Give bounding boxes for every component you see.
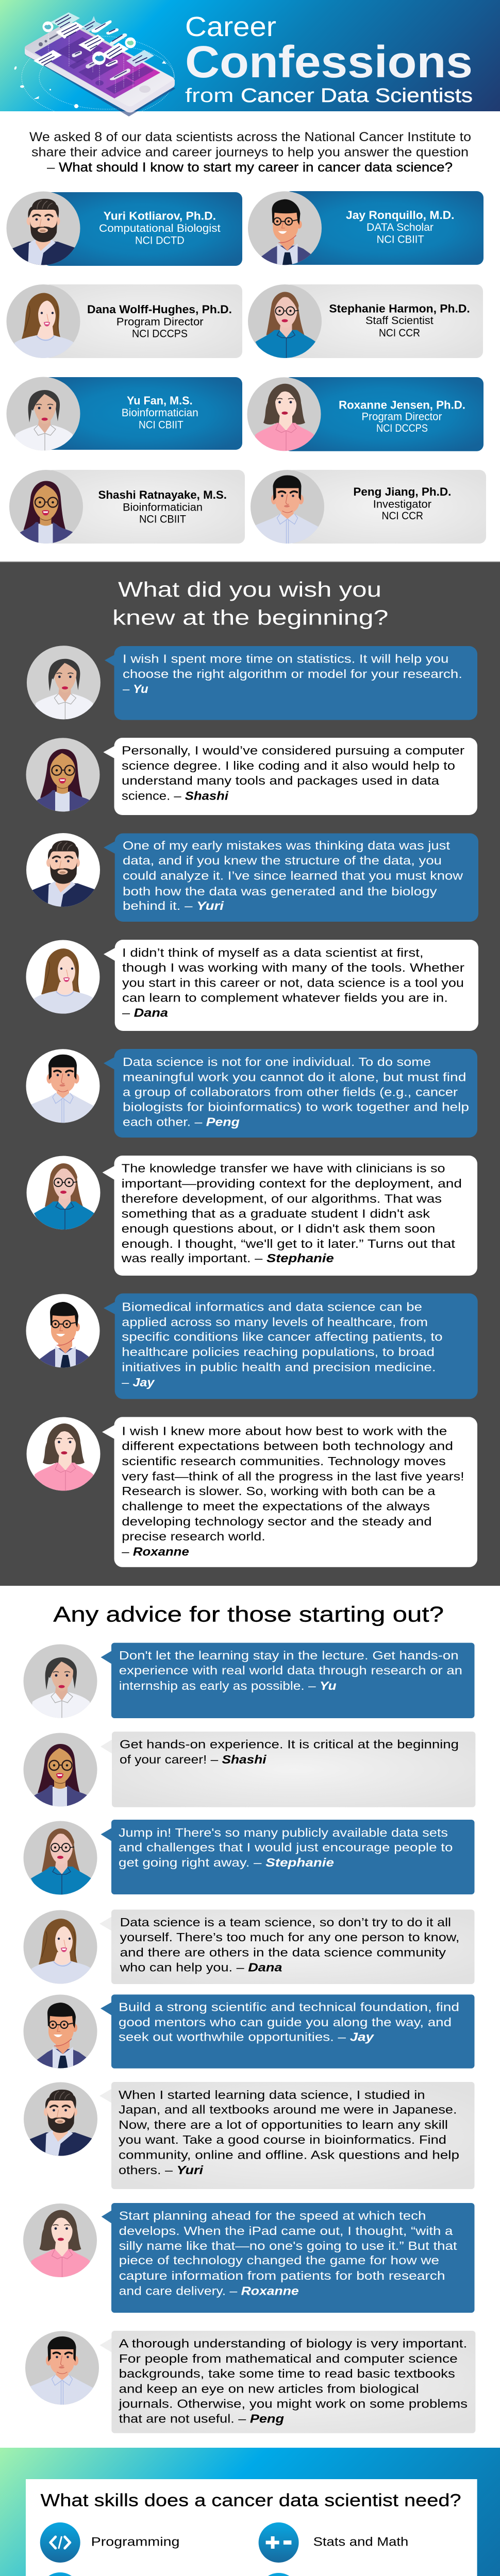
name and role: Program Director <box>116 316 204 328</box>
card: Yuri Kotliarov <box>6 192 242 269</box>
speech bubble: Data science is not for one individual. To do some <box>123 1055 431 1069</box>
speech bubble: behind it. – Yuri <box>123 899 224 912</box>
skill: Programming <box>40 2522 179 2563</box>
speech bubble <box>103 738 477 815</box>
name and role: NCI DCCPS <box>376 422 428 434</box>
speech bubble: – Roxanne <box>122 1545 189 1558</box>
speech bubble: Get hands-on experience. It is critical at the beginning <box>120 1737 459 1751</box>
quote: Yuri <box>26 833 478 922</box>
skill: Stats and Math: Stats and Math <box>313 2535 408 2549</box>
portrait: Dana <box>6 284 80 363</box>
speech bubble: initiatives in public health and precision medicine. <box>122 1361 436 1374</box>
advice: Dana <box>24 1909 474 1988</box>
speech bubble: and care delivery. – Roxanne <box>119 2284 299 2297</box>
speech bubble: of your career! – Shashi <box>120 1753 266 1766</box>
card: Stephanie Harmon <box>248 284 483 359</box>
name and role: Bioinformatician <box>123 501 203 513</box>
speech bubble <box>99 2331 475 2433</box>
heading: knew at the beginning? <box>112 606 389 630</box>
card: Shashi Ratnayake <box>9 470 245 548</box>
name and role <box>339 399 465 434</box>
speech bubble: Japan, and all textbooks around me were in Japanese. <box>119 2103 457 2116</box>
speech bubble: enough. I thought, “we'll get to it later.” Turns out that <box>122 1237 456 1250</box>
name and role: Computational Biologist <box>99 223 221 234</box>
portrait: Yuri <box>26 833 100 911</box>
name and role: Peng Jiang, Ph.D. <box>353 485 451 498</box>
speech bubble: Data science is a team science, so don’t try to do it all <box>120 1916 451 1929</box>
portrait: Yu <box>6 377 80 455</box>
advice: Yu <box>24 1643 474 1722</box>
speech bubble: and keep an eye on new articles from biological <box>119 2382 419 2395</box>
speech bubble: applied across so many levels of healthcare, from <box>122 1315 428 1329</box>
speech bubble: healthcare policies reaching populations, to broad <box>122 1345 435 1359</box>
speech bubble: you start in this career or not, data science is a tool you <box>122 976 464 990</box>
speech bubble: could analyze it. I’ve since learned that you must know <box>123 869 463 882</box>
speech bubble: yourself. There’s too much for any one person to know, <box>120 1930 459 1944</box>
portrait: Shashi <box>26 738 100 816</box>
speech bubble <box>103 1156 477 1276</box>
title <box>185 11 473 107</box>
name and role: Investigator <box>373 499 431 511</box>
speech bubble: I wish I spent more time on statistics. It will help you <box>123 652 448 666</box>
speech bubble: scientific research communities. Technology moves <box>122 1454 446 1468</box>
name and role: NCI CCR <box>379 327 420 339</box>
name and role <box>353 485 451 522</box>
name and role: Jay Ronquillo, M.D. <box>346 209 455 222</box>
title: Cancer Data Scientists <box>241 85 473 107</box>
speech bubble: The knowledge transfer we have with clinicians is so <box>122 1162 445 1175</box>
speech bubble <box>101 1732 475 1807</box>
name and role <box>99 210 221 246</box>
name and role: DATA Scholar <box>366 222 434 233</box>
name and role: Yu Fan, M.S. <box>127 394 193 407</box>
speech bubble: you want. Take a good course in bioinformatics. Find <box>119 2133 446 2146</box>
speech bubble: Build a strong scientific and technical foundation, find <box>119 2001 459 2014</box>
speech bubble: experience with real world data through research or an <box>119 1664 462 1677</box>
icon: atom <box>40 2572 80 2576</box>
speech bubble: internship as early as possible. – Yu <box>119 1679 337 1692</box>
speech bubble: science degree. I like coding and it also would help to <box>122 759 455 772</box>
speech bubble: choose the right algorithm or model for your research. <box>123 667 462 681</box>
speech bubble <box>99 1909 474 1984</box>
speech bubble: I didn’t think of myself as a data scientist at first, <box>122 946 424 959</box>
skill: Technology and Trends <box>259 2573 460 2576</box>
speech bubble: who can help you. – Dana <box>119 1961 282 1974</box>
advice: Yuri <box>24 2082 474 2189</box>
speech bubble: – Dana <box>122 1006 168 1020</box>
quote: Roxanne <box>27 1417 477 1567</box>
name and role <box>329 302 470 339</box>
speech bubble: piece of technology changed the game for how we <box>119 2253 439 2267</box>
title: Confessions <box>185 37 473 87</box>
heading <box>112 578 389 630</box>
speech bubble: therefore development, of our algorithms. That was <box>122 1192 442 1206</box>
speech bubble: something that as a graduate student I didn't ask <box>122 1207 430 1221</box>
icon: trend arrow <box>259 2573 299 2576</box>
portrait: Yuri <box>24 2082 98 2160</box>
speech bubble: challenge to meet the expectations of the always <box>122 1500 430 1513</box>
panel: what did you wish you knew <box>0 562 500 1586</box>
speech bubble <box>101 1994 474 2069</box>
speech bubble: meaningful work you cannot do it alone, but must find <box>123 1071 466 1084</box>
speech bubble: For people from mathematical and computer science <box>119 2352 458 2365</box>
heading: Any advice for those starting out? <box>53 1602 444 1626</box>
name and role <box>87 303 232 340</box>
name and role: Roxanne Jensen, Ph.D. <box>339 399 465 412</box>
speech bubble: that are not useful. – Peng <box>119 2412 284 2425</box>
speech bubble: a group of collaborators from other fields (e.g., cancer <box>123 1086 458 1099</box>
panel: any advice for those starting out <box>23 1602 475 2433</box>
name and role: NCI CCR <box>381 510 423 522</box>
card: Yu Fan <box>6 377 242 455</box>
portrait: Yu <box>27 646 101 724</box>
name and role: Program Director <box>362 411 442 423</box>
portrait: Peng <box>26 1049 100 1127</box>
intro text: We asked 8 of our data scientists across the National Cancer Institute to <box>29 130 471 144</box>
speech bubble <box>102 1417 477 1567</box>
speech bubble: precise research world. <box>122 1530 265 1543</box>
speech bubble: data, and if you knew the structure of the data, you <box>123 854 442 867</box>
portrait: Peng <box>251 470 324 548</box>
name and role <box>122 394 198 431</box>
card: Peng Jiang <box>251 470 486 548</box>
portrait: Yuri <box>6 192 80 269</box>
name and role: Staff Scientist <box>365 315 434 327</box>
speech bubble: important—providing context for the deployment, and <box>122 1177 462 1190</box>
advice: Jay <box>24 1994 474 2073</box>
portrait: Roxanne <box>27 1417 100 1495</box>
name and role <box>346 209 455 245</box>
name and role: Shashi Ratnayake, M.S. <box>98 488 227 501</box>
header banner <box>0 0 500 118</box>
portrait: Yu <box>24 1645 97 1722</box>
quote: Yu <box>27 646 477 724</box>
title: from <box>185 85 234 107</box>
advice: Roxanne <box>23 2203 474 2313</box>
icon: code brackets <box>40 2522 80 2563</box>
speech bubble: get going right away. – Stephanie <box>119 1856 334 1869</box>
card: Roxanne Jensen <box>247 377 484 455</box>
name and role <box>98 488 227 525</box>
speech bubble: each other. – Peng <box>123 1115 240 1129</box>
speech bubble: capture information from patients for both research <box>119 2269 445 2282</box>
speech bubble: good mentors who can guide you along the way, and <box>119 2015 452 2029</box>
portrait: Stephanie <box>248 284 322 359</box>
skill: Programming: Programming <box>91 2535 179 2549</box>
name and role: NCI CBIIT <box>377 233 424 245</box>
speech bubble: and challenges that I would just encourage people to <box>119 1840 453 1854</box>
speech bubble: developing technology sector and the steady and <box>122 1515 432 1528</box>
heading: skills: What skills does a cancer data scientist need? <box>41 2490 461 2510</box>
panel: skills and languages <box>0 2448 500 2576</box>
speech bubble: Don't let the learning stay in the lecture. Get hands-on <box>119 1649 459 1662</box>
speech bubble <box>105 646 477 720</box>
advice: Peng <box>25 2331 475 2433</box>
speech bubble <box>104 1293 478 1399</box>
speech bubble <box>104 834 478 922</box>
portrait: Shashi <box>24 1733 97 1811</box>
intro text: – What should I know to start my career in cancer data science? <box>47 160 453 175</box>
speech bubble: Personally, I would’ve considered pursuing a computer <box>122 743 464 757</box>
speech bubble: journals. Otherwise, you might work on some problems <box>118 2397 468 2410</box>
title: Career <box>185 11 276 42</box>
portrait: Jay <box>24 1995 97 2073</box>
speech bubble: though I was working with many of the tools. Whether <box>122 961 464 974</box>
speech bubble: develops. When the iPad came out, I thought, “with a <box>119 2224 453 2238</box>
portrait: Dana <box>26 940 100 1018</box>
card: Jay Ronquillo <box>248 191 484 269</box>
name and role: Yuri Kotliarov, Ph.D. <box>104 210 216 223</box>
speech bubble: community, online and offline. Ask questions and help <box>119 2148 459 2162</box>
portrait: Stephanie <box>27 1156 100 1230</box>
quote: Stephanie <box>27 1156 477 1276</box>
portrait: Jay <box>26 1294 100 1372</box>
speech bubble: seek out worthwhile opportunities. – Jay <box>119 2030 375 2044</box>
name and role: Stephanie Harmon, Ph.D. <box>329 302 470 315</box>
speech bubble: Research is slower. So, working with both can be a <box>122 1484 436 1498</box>
icon: plus minus <box>259 2522 299 2563</box>
name and role: NCI CBIIT <box>139 419 184 431</box>
speech bubble: both how the data was generated and the biology <box>123 885 437 898</box>
speech bubble: different expectations between both technology and <box>122 1439 453 1452</box>
speech bubble: very fast—think of all the progress in the last five years! <box>122 1469 464 1483</box>
name and role: NCI DCTD <box>135 234 185 246</box>
name and role: NCI CBIIT <box>139 513 186 525</box>
skill: Stats and Math <box>259 2522 408 2563</box>
advice: Stephanie <box>24 1820 474 1895</box>
intro text: share their advice and career journeys to help you answer the question <box>31 145 469 160</box>
portrait: Stephanie <box>24 1821 97 1895</box>
name and role: NCI DCCPS <box>132 328 188 340</box>
speech bubble: Biomedical informatics and data science can be <box>122 1300 422 1313</box>
speech bubble: backgrounds, take some time to read basic textbooks <box>119 2367 455 2380</box>
speech bubble <box>104 940 478 1031</box>
portrait: Shashi <box>9 470 83 548</box>
card: Dana Wolff-Hughes <box>6 284 242 363</box>
quote: Dana <box>26 940 478 1031</box>
portrait: Jay <box>248 191 322 269</box>
portrait: Roxanne <box>247 377 321 455</box>
quote: Jay <box>26 1293 478 1399</box>
speech bubble <box>101 1643 474 1718</box>
speech bubble: enough questions about, or I didn't ask them soon <box>122 1222 435 1235</box>
speech bubble: – Yu <box>123 682 148 696</box>
quote: Peng <box>26 1049 477 1138</box>
speech bubble: One of my early mistakes was thinking data was just <box>123 839 451 852</box>
speech bubble <box>99 2082 474 2189</box>
speech bubble: Start planning ahead for the speed at which tech <box>119 2209 426 2223</box>
phone illustration with chat bubbles <box>14 12 175 118</box>
speech bubble: can learn to complement whatever fields you are in. <box>122 991 448 1005</box>
speech bubble: and there are others in the data science community <box>120 1946 446 1959</box>
skill: Science Background <box>40 2572 220 2576</box>
name and role: Bioinformatician <box>122 407 198 419</box>
speech bubble: was really important. – Stephanie <box>121 1251 334 1265</box>
speech bubble <box>102 2203 474 2313</box>
name and role: Dana Wolff-Hughes, Ph.D. <box>87 303 232 316</box>
speech bubble: understand many tools and packages used in data <box>122 774 440 787</box>
speech bubble: A thorough understanding of biology is very important. <box>119 2337 467 2350</box>
portrait: Roxanne <box>23 2204 97 2281</box>
portrait: Dana <box>24 1910 97 1988</box>
speech bubble: When I started learning data science, I studied in <box>119 2088 425 2102</box>
speech bubble: specific conditions like cancer affecting patients, to <box>122 1330 443 1344</box>
speech bubble: Jump in! There's so many publicly available data sets <box>119 1826 448 1839</box>
speech bubble: silly name like that—no one's going to use it.” But that <box>119 2239 457 2252</box>
advice: Shashi <box>24 1732 475 1811</box>
speech bubble: biologists for bioinformatics) to work together and help <box>123 1100 469 1114</box>
speech bubble: I wish I knew more about how best to work with the <box>122 1424 447 1437</box>
speech bubble <box>104 1049 477 1138</box>
portrait: Peng <box>25 2331 99 2409</box>
heading: What did you wish you <box>118 578 381 601</box>
intro text <box>29 130 471 175</box>
speech bubble: Now, there are a lot of opportunities to learn any skill <box>119 2118 448 2131</box>
speech bubble: others. – Yuri <box>119 2163 204 2177</box>
speech bubble <box>101 1820 474 1894</box>
speech bubble: – Jay <box>122 1376 155 1389</box>
quote: Shashi <box>26 738 477 816</box>
speech bubble: science. – Shashi <box>122 789 229 803</box>
